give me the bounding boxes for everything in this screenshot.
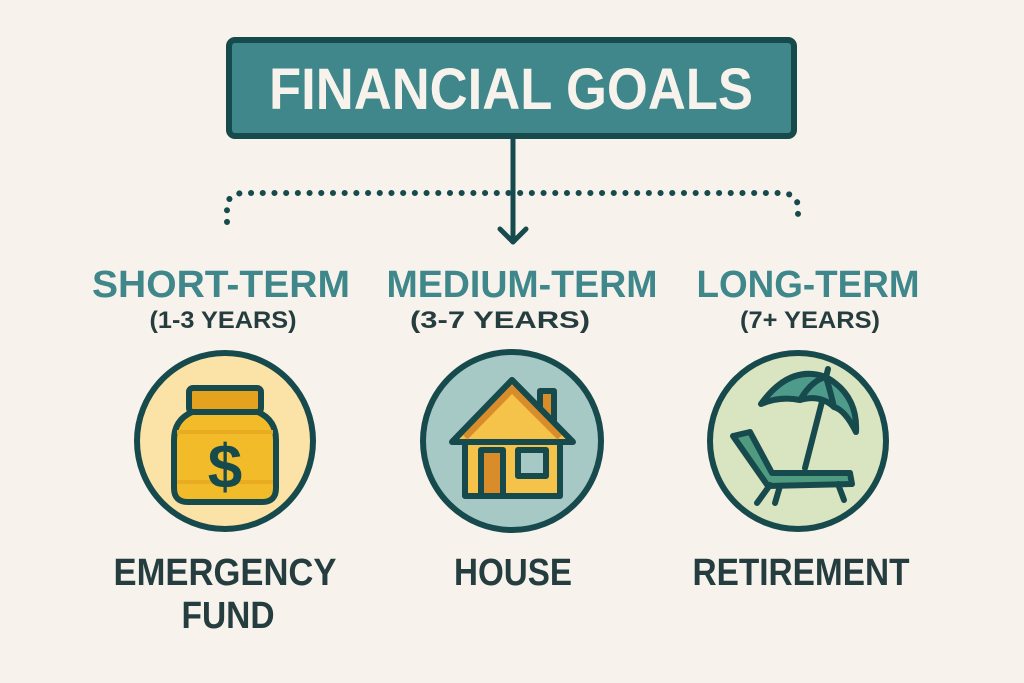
label: emergency fund: EMERGENCY	[114, 552, 336, 594]
heading: long-term: (7+ YEARS)	[740, 307, 880, 334]
label: house: HOUSE	[454, 552, 572, 594]
icon: jar	[137, 353, 313, 529]
heading: medium-term: MEDIUM-TERM	[386, 264, 658, 306]
heading: short-term: (1-3 YEARS)	[150, 307, 296, 334]
heading: medium-term: (3-7 YEARS)	[410, 307, 590, 334]
label: emergency fund	[114, 552, 336, 637]
heading: long-term: LONG-TERM	[696, 264, 920, 306]
label: emergency fund: FUND	[182, 595, 274, 637]
icon: jar: $	[208, 433, 242, 502]
heading: short-term: SHORT-TERM	[92, 264, 350, 306]
title	[229, 40, 794, 136]
label: retirement: RETIREMENT	[692, 552, 910, 594]
icon: beach chair	[710, 353, 886, 529]
heading: short-term	[92, 264, 350, 334]
dotted connector	[227, 193, 798, 222]
heading: long-term	[696, 264, 920, 334]
title: FINANCIAL GOALS	[269, 57, 753, 122]
heading: medium-term	[386, 264, 658, 334]
icon: house	[423, 352, 601, 530]
arrow: down	[500, 138, 526, 242]
